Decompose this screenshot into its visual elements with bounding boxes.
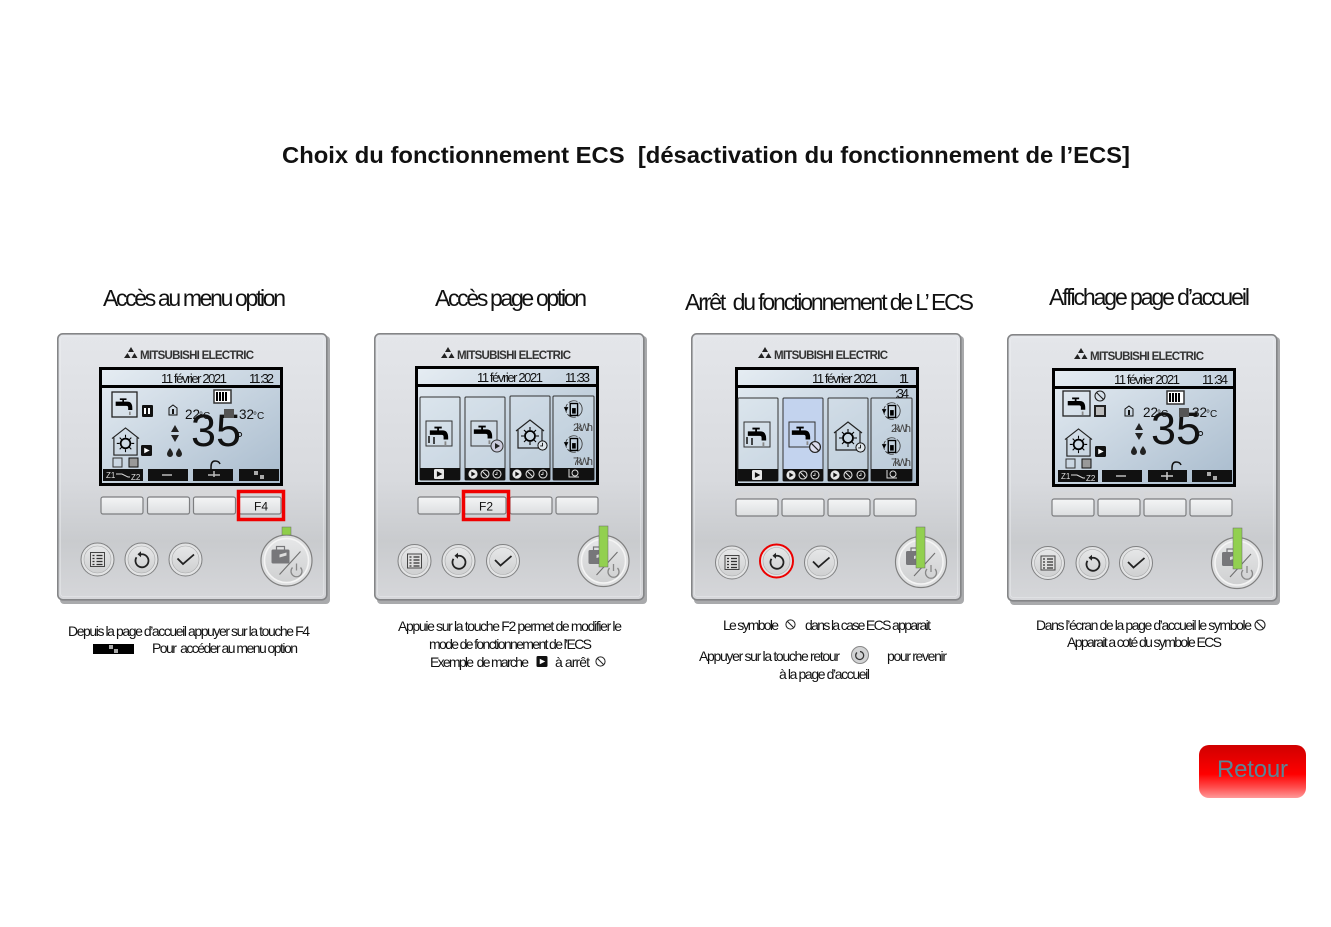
card: heating mode: [828, 398, 868, 481]
screen: home page ECS stopped: 35: [1151, 403, 1201, 454]
button: Retour: Retour: [1217, 756, 1288, 783]
caption: step 3: Appuyer sur la touche retour: [699, 648, 840, 664]
title: Choix du fonctionnement ECS [désactivation du fonctionnement de l’ECS]: [282, 142, 1130, 168]
card: hot water mode: [465, 397, 505, 480]
screen: home page ECS stopped: Z2: [1086, 474, 1096, 483]
panel: controller step 4: [1008, 335, 1280, 605]
caption: step 1: Pour accéder au menu option: [152, 640, 298, 656]
screen: ECS stopped: 11 février 2021: [812, 371, 878, 386]
indicator: green bar: [599, 526, 608, 567]
card: hot water settings: [420, 397, 460, 480]
soft keys: [101, 490, 281, 514]
icon: stop: [596, 657, 605, 666]
screen: option page: [415, 368, 599, 484]
indicator: green bar: [916, 527, 925, 568]
screen: home page: Z1: [106, 471, 116, 480]
screen: home page: 22: [185, 407, 200, 422]
caption: step 4: Apparait a coté du symbole ECS: [1067, 634, 1222, 650]
highlight: back button: [760, 544, 793, 578]
logo: MITSUBISHI ELECTRIC: [140, 350, 254, 362]
highlight: F4 key: [238, 492, 284, 520]
round buttons: [716, 544, 838, 579]
screen: home page ECS stopped: °: [1197, 428, 1204, 448]
screen: home page: 35: [191, 405, 241, 456]
screen: home page ECS stopped: [1052, 370, 1236, 486]
button: Retour: [1199, 745, 1306, 798]
card: energy: 2kWh: [573, 422, 593, 434]
power button: [1212, 538, 1262, 588]
soft keys: F2: [479, 500, 493, 514]
icon: back button: [852, 646, 868, 664]
logo: MITSUBISHI ELECTRIC: [457, 350, 571, 362]
indicator: green bar: [1233, 528, 1242, 569]
screen: home page: °C: [253, 411, 264, 422]
heading: step 4: Affichage page d’accueil: [1049, 284, 1250, 310]
screen: home page ECS stopped: °C: [1157, 409, 1168, 420]
card: energy: [871, 398, 912, 481]
screen: home page: [99, 368, 283, 484]
panel: controller step 1: [58, 334, 330, 604]
screen: home page: Z2: [131, 473, 141, 482]
screen: option page: 11 février 2021: [477, 370, 543, 385]
icon: option soft key: [93, 644, 134, 654]
card: hot water settings: [738, 398, 778, 481]
round buttons: [81, 543, 202, 576]
highlight: F2 key: [464, 492, 508, 520]
screen: home page: 11 février 2021: [161, 371, 227, 386]
card: energy: 7kWh: [891, 457, 911, 469]
screen: option page: 11 :33: [565, 370, 590, 385]
round buttons: [1032, 546, 1152, 580]
caption: step 3: pour revenir: [887, 648, 947, 664]
caption: step 2: Appuie sur la touche F2 permet de modifier le: [398, 618, 622, 634]
soft keys: [1052, 492, 1232, 516]
caption: step 2: mode de fonctionnement de l’ECS: [429, 636, 592, 652]
screen: ECS stopped: 11: [899, 371, 909, 386]
caption: step 2: [398, 618, 622, 670]
icon: stop: [1255, 620, 1265, 630]
caption: step 4: [1036, 617, 1265, 650]
card: heating mode: [510, 396, 550, 480]
heading: step 1: Accès au menu option: [103, 285, 286, 311]
caption: step 3: à la page d’accueil: [779, 666, 870, 682]
logo: MITSUBISHI ELECTRIC: [1090, 351, 1204, 363]
screen: ECS stopped: [735, 368, 919, 484]
screen: home page: 11 :32: [249, 371, 274, 386]
soft keys: [736, 492, 916, 516]
power button: [578, 536, 629, 586]
soft keys: [418, 490, 598, 514]
power button: [261, 535, 312, 586]
card: energy: 7kWh: [573, 456, 593, 468]
caption: step 3: dans la case ECS apparait: [805, 617, 931, 633]
panel: controller step 3: [692, 334, 964, 604]
power button: [896, 536, 946, 588]
screen: home page ECS stopped: °C: [1206, 409, 1217, 420]
screen: home page: °: [236, 429, 243, 449]
round buttons: [398, 544, 520, 578]
logo: MITSUBISHI ELECTRIC: [774, 350, 888, 362]
screen: ECS stopped: :34: [895, 386, 909, 401]
caption: step 3: [699, 617, 947, 682]
heading: step 2: Accès page option: [435, 285, 587, 311]
indicator: green: [282, 527, 291, 535]
panel: controller step 2: [375, 334, 647, 604]
soft keys: F4: [254, 500, 268, 514]
screen: home page ECS stopped: 11 :34: [1202, 372, 1228, 387]
screen: home page: °C: [199, 411, 210, 422]
caption: step 4: Dans l’écran de la page d’accueil le symbole: [1036, 617, 1252, 633]
caption: step 1: [68, 623, 310, 656]
caption: step 3: Le symbole: [723, 617, 779, 633]
heading: step 3: Arrêt du fonctionnement de L’ ECS: [685, 289, 974, 315]
screen: home page ECS stopped: 32: [1192, 405, 1207, 420]
icon: play: [536, 656, 548, 667]
screen: home page ECS stopped: Z1: [1061, 472, 1071, 481]
caption: step 2: Exemple de marche: [430, 654, 529, 670]
card: energy: [553, 396, 594, 480]
icon: stop: [786, 620, 795, 629]
screen: home page ECS stopped: 11 février 2021: [1114, 372, 1180, 387]
card: hot water off (selected): [783, 398, 823, 481]
card: energy: 2kWh: [891, 423, 911, 435]
screen: home page: 32: [239, 407, 254, 422]
caption: step 1: Depuis la page d’accueil appuyer sur la touche F4: [68, 623, 310, 639]
screen: home page ECS stopped: 22: [1143, 405, 1158, 420]
caption: step 2: à arrêt: [555, 654, 590, 670]
